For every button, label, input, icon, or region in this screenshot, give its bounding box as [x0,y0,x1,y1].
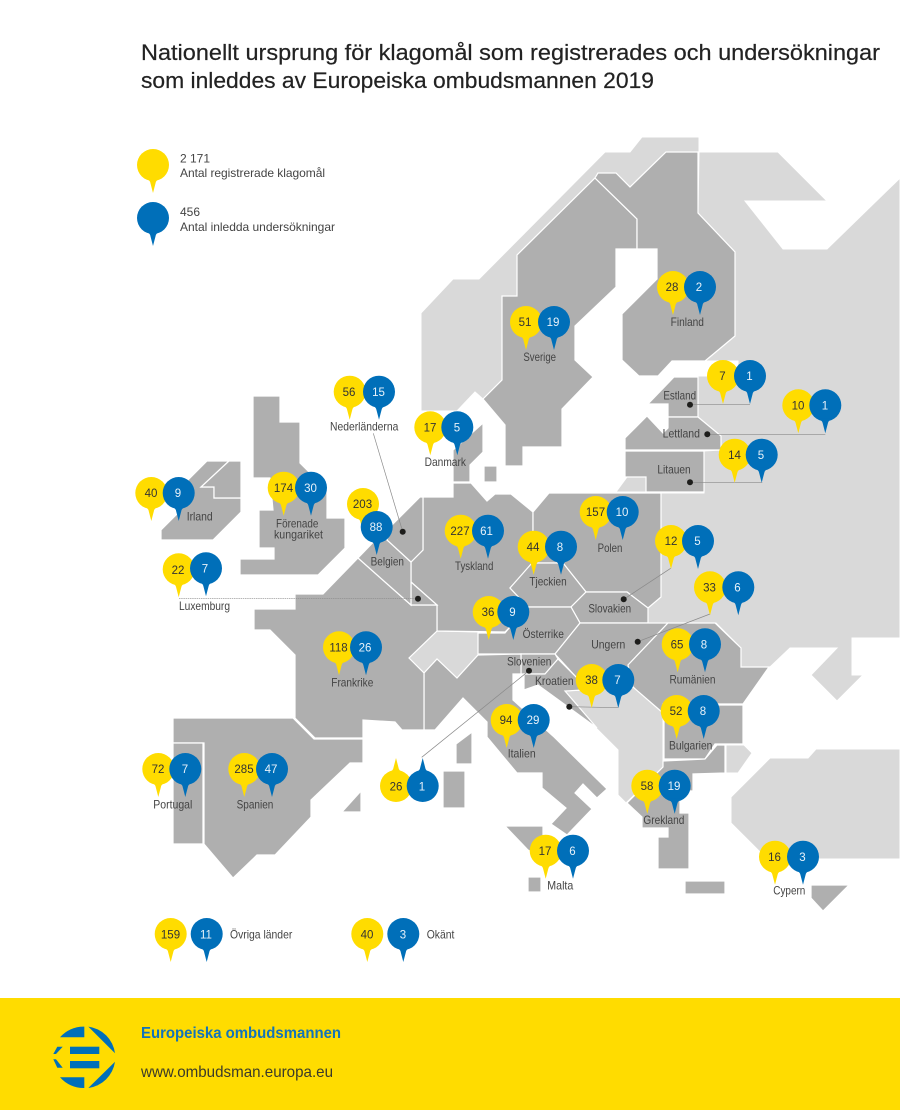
pin: Nederländerna [330,376,406,535]
icon: European Ombudsman logo [53,1027,115,1088]
pin: Övriga länder: 11 [200,930,212,942]
pin: Spanien: 47 [265,764,277,776]
pin: Tyskland: 61 [480,526,493,538]
pin: Belgien [347,488,404,568]
pin: Slovenien: 1 [419,782,425,794]
pin: Finland [657,271,716,329]
country: Poland [533,493,661,608]
country: Balearic island [342,791,361,812]
pin: Slovenien: Slovenien [507,655,551,669]
country: Ireland [161,461,241,540]
non-EU: Norway [421,137,699,411]
country: Portugal [173,743,203,844]
country: Greece [627,745,725,869]
pin: Belgien: 203 [353,499,372,511]
country: Germany [411,483,533,632]
pin: Rumänien: 65 [671,640,683,652]
pin: Belgien: 88 [370,522,382,534]
pin: Nederländerna: Nederländerna [330,420,399,434]
pin: Grekland: 58 [641,781,653,793]
country: Denmark [453,423,483,482]
pin: Finland: Finland [671,315,704,329]
pin: Luxemburg: 7 [202,564,208,576]
pin: Bulgarien: 8 [700,706,706,718]
legend: complaints: Antal registrerade klagomål [180,166,325,180]
pin: Förenade kungariket [268,472,327,542]
non-EU: Turkey [731,749,900,859]
pin: Lettland [663,389,841,441]
country: Czechia [510,563,586,607]
pin: Tjeckien [518,531,577,588]
pin: Tyskland: 227 [450,526,470,538]
non-EU: Russia and eastern neighbours [648,152,900,701]
pin: Österrike: 9 [509,607,516,619]
legend: inquiries [137,202,335,246]
pin: Österrike: Österrike [523,627,564,641]
pin: Finland: 2 [696,282,702,294]
legend: complaints [137,149,325,193]
title [141,40,880,93]
pin: Lettland: 10 [792,400,804,412]
country: Lithuania [625,451,704,492]
pin: Cypern: 3 [799,852,806,864]
country: Corsica [456,732,472,764]
pin: Danmark: 17 [424,422,436,434]
title: som inleddes av Europeiska ombudsmannen 2019 [141,68,654,93]
pin: Polen [580,496,639,555]
pin: Spanien [228,753,288,811]
country: Latvia [625,416,721,450]
pin: Bulgarien: 52 [670,706,682,718]
pin: Övriga länder [155,918,292,962]
pin: Slovakien [588,525,714,615]
pin: Sverige: 19 [547,317,559,329]
pin: Förenade kungariket: 30 [304,483,317,495]
pin: Danmark: Danmark [425,455,467,469]
pin: Italien: Italien [508,747,536,761]
pin: Irland [135,477,213,524]
pin: Kroatien: Kroatien [535,674,574,688]
pin: Kroatien: 7 [614,675,621,687]
pin: Spanien: Spanien [237,797,273,811]
pin: Luxemburg: Luxemburg [179,599,230,613]
pin: Litauen: 14 [728,450,741,462]
pin: Litauen: 5 [758,450,764,462]
pin: Litauen [657,439,778,485]
pin: Cypern: Cypern [773,884,805,898]
pin: Portugal: 72 [152,764,164,776]
pin: Ungern: 33 [703,582,716,594]
pin: Ungern: Ungern [591,637,625,651]
pin: Nederländerna: 15 [372,387,385,399]
pin: Förenade kungariket: Förenade [276,516,319,530]
pin: Belgien: Belgien [371,554,404,568]
pin: Tjeckien: 8 [557,542,563,554]
pin: Tyskland: Tyskland [455,559,493,573]
pin: Slovenien: 26 [390,782,402,794]
pin: Grekland [631,770,691,827]
legend [137,149,335,246]
pin: Slovakien: 5 [694,536,701,548]
country: France [254,558,437,738]
pin: Irland: Irland [187,510,213,524]
pin: Estland: 7 [719,371,726,383]
pin: Polen: 10 [616,507,628,519]
pin: Frankrike: 26 [359,642,371,654]
pin: Litauen: Litauen [657,462,691,476]
pin: Österrike [473,596,564,641]
country: Cyprus [811,885,849,911]
pin: Slovakien: Slovakien [588,601,631,615]
pin: Sverige [510,306,570,364]
pin: Ungern: 6 [734,582,741,594]
footer website: www.ombudsman.europa.eu [140,1064,333,1081]
country: Sicily [505,826,543,857]
legend: complaints: 2 171 [180,152,210,166]
footer band [0,998,900,1110]
pin: Övriga länder: Övriga länder [230,928,292,942]
data pins [135,271,841,962]
pin: Portugal [142,753,201,811]
country: Slovakia [571,592,648,623]
pin: Grekland: Grekland [643,813,684,827]
pin: Danmark [414,411,473,469]
country: Malta [528,877,541,892]
country: Slovenia [521,654,558,674]
pin: Rumänien: 8 [701,640,707,652]
pin: Lettland: Lettland [663,427,700,441]
country: United Kingdom [240,396,345,575]
pin: Estland: Estland [663,388,696,402]
pin: Italien: 94 [500,715,513,727]
pin: Frankrike [323,631,382,690]
footer organisation name: Europeiska ombudsmannen [141,1025,341,1042]
pin: Irland: 40 [145,488,157,500]
country: Netherlands [387,497,423,562]
pin: Rumänien [662,628,721,687]
non-EU: Kaliningrad [616,477,646,492]
country: Spain [173,718,363,878]
country: Austria [478,607,580,654]
country: Sweden [483,178,637,466]
pin: Frankrike: Frankrike [331,676,374,690]
pin: Nederländerna: 56 [343,387,355,399]
pin: Lettland: 1 [822,400,828,412]
country: Danish island [484,466,497,482]
country: Romania [628,623,769,713]
pin: Okänt: 40 [361,930,373,942]
pin: Estland: 1 [746,371,753,383]
pin: Sverige: 51 [519,317,531,329]
pin: Polen: 157 [586,507,605,519]
pin: Italien: 29 [527,715,539,727]
pin: Förenade kungariket: kungariket [274,528,324,542]
pin: Tjeckien: Tjeckien [529,574,567,588]
legend: inquiries: 456 [180,205,200,219]
pin: Förenade kungariket: 174 [274,483,294,495]
pin: Okänt: 3 [400,930,406,942]
country: Italy [424,654,607,835]
non-EU: Switzerland [409,631,478,678]
pin: Frankrike: 118 [329,642,348,654]
pin: Slovakien: 12 [665,536,677,548]
pin: Bulgarien: Bulgarien [669,738,712,752]
country: Bulgaria [664,705,743,759]
pin: Spanien: 285 [234,764,254,776]
pin: Malta: 17 [539,846,551,858]
pin: Okänt [351,918,455,962]
pin: Irland: 9 [175,488,181,500]
country: Finland [595,152,735,376]
pin: Malta: 6 [569,846,576,858]
legend: inquiries: Antal inledda undersökningar [180,220,335,234]
pin: Luxemburg: 22 [172,565,184,577]
pin: Rumänien: Rumänien [670,673,716,687]
pin: Kroatien: 38 [585,675,598,687]
pin: Italien [491,704,550,761]
pin: Estland [663,360,766,408]
pin: Grekland: 19 [668,781,680,793]
country: Luxembourg [411,582,437,605]
pin: Malta [530,835,589,892]
pin: Övriga länder: 159 [161,930,180,942]
country: Croatia [524,659,633,728]
pin: Okänt: Okänt [427,928,455,942]
pin: Cypern [759,841,819,898]
country: Estonia [648,377,698,417]
pin: Bulgarien [661,695,720,752]
map of Europe [161,137,900,911]
pin: Tyskland [445,515,504,573]
pin: Finland: 28 [666,282,678,294]
pin: Kroatien [535,664,634,710]
country: Belgium [358,528,411,605]
pin: Polen: Polen [598,541,622,555]
pin: Malta: Malta [547,878,574,892]
non-EU: Turkey in Europe [726,745,752,773]
pin: Österrike: 36 [482,607,494,619]
pin: Ungern [591,571,754,651]
pin: Tjeckien: 44 [527,542,540,554]
pin: Portugal: 7 [182,764,188,776]
pin: Portugal: Portugal [153,797,192,811]
pin: Danmark: 5 [454,422,460,434]
title: Nationellt ursprung för klagomål som registrerades och undersökningar [141,40,880,65]
country: Hungary [555,623,668,687]
pin: Luxemburg [163,552,421,613]
country: Sardinia [443,771,465,808]
pin: Cypern: 16 [768,852,781,864]
pin: Sverige: Sverige [523,350,556,364]
pin: Slovenien [380,655,551,802]
country: Northern Ireland [201,461,241,498]
country: Crete [685,881,725,894]
non-EU: Western Balkans [565,687,663,803]
